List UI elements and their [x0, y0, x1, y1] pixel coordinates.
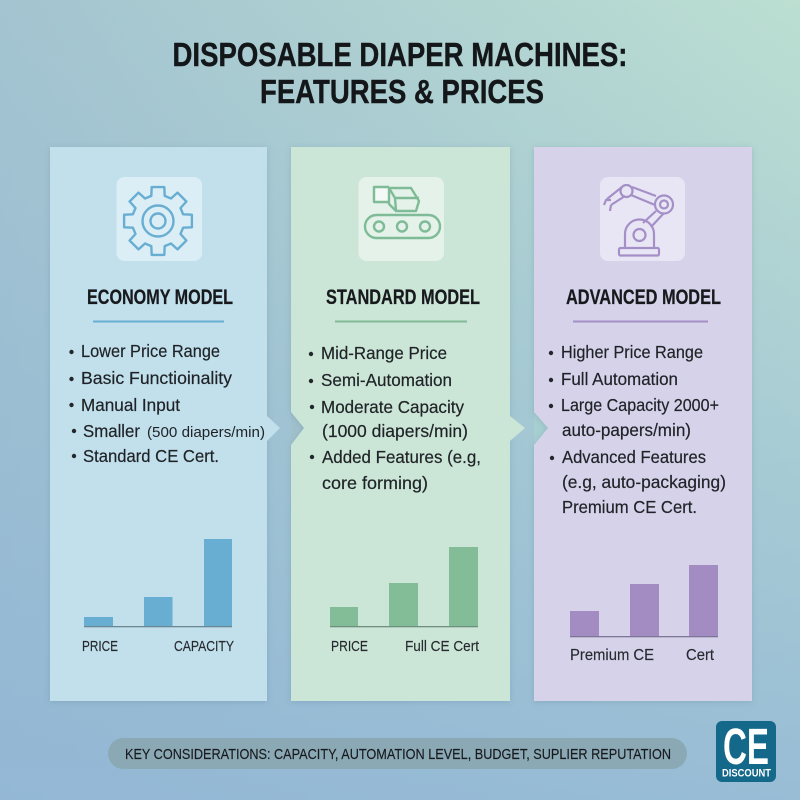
- feature list: advanced: Advanced Features: [562, 447, 706, 467]
- bar chart: economy: PRICE: [82, 638, 118, 655]
- feature list: economy: Standard CE Cert.: [83, 446, 219, 466]
- feature list: standard: Moderate Capacity: [321, 397, 464, 417]
- feature list: economy: Lower Price Range: [81, 341, 220, 361]
- bar chart: standard: PRICE: [331, 638, 368, 655]
- feature list: advanced: [549, 342, 726, 517]
- heading: advanced model: ADVANCED MODEL: [566, 285, 721, 309]
- bar chart: economy: CAPACITY: [174, 638, 234, 655]
- logo: CE discount: CE: [723, 718, 769, 775]
- title: DISPOSABLE DIAPER MACHINES:: [172, 36, 628, 73]
- feature list: standard: Added Features (e.g,: [322, 447, 481, 467]
- feature list: economy: Manual Input: [81, 395, 180, 415]
- icon: robot arm: [600, 177, 685, 261]
- feature list: advanced: Full Automation: [561, 369, 678, 389]
- bar chart: advanced: Cert: [686, 647, 715, 664]
- icon: conveyor: [358, 177, 444, 261]
- feature list: standard: [309, 343, 481, 493]
- feature list: standard: Mid-Range Price: [321, 343, 447, 363]
- heading: standard model: STANDARD MODEL: [326, 285, 480, 309]
- logo: CE discount: DISCOUNT: [722, 768, 771, 780]
- callout: key considerations: KEY CONSIDERATIONS: CAPACITY, AUTOMATION LEVEL, BUDGET, SUPLIER REPUTATION: [125, 746, 671, 763]
- feature list: advanced: Higher Price Range: [561, 342, 703, 362]
- feature list: advanced: Premium CE Cert.: [562, 497, 697, 517]
- feature list: economy: (500 diapers/min): [147, 424, 265, 441]
- arrow: standard to advanced: [510, 416, 525, 441]
- logo: CE discount: [716, 718, 776, 782]
- arrow: advanced notch: [534, 412, 548, 445]
- panel: advanced: [534, 147, 752, 701]
- feature list: advanced: (e.g, auto-packaging): [562, 472, 726, 492]
- heading: economy model: ECONOMY MODEL: [87, 285, 233, 309]
- feature list: advanced: Large Capacity 2000+: [561, 395, 719, 415]
- panel: standard: [291, 147, 525, 701]
- feature list: economy: Basic Functioinality: [81, 368, 232, 388]
- feature list: advanced: auto-papers/min): [562, 420, 691, 440]
- title: [172, 36, 628, 110]
- title: FEATURES & PRICES: [260, 73, 544, 110]
- feature list: standard: core forming): [322, 473, 428, 493]
- arrow: standard notch: [291, 412, 304, 445]
- icon: gear: [116, 177, 202, 261]
- feature list: economy: Smaller: [83, 421, 140, 441]
- bar chart: advanced: Premium CE: [570, 647, 654, 664]
- feature list: standard: Semi-Automation: [321, 370, 452, 390]
- bar chart: standard: [330, 547, 480, 655]
- arrow: economy to standard: [267, 416, 280, 441]
- callout: key considerations: [108, 738, 687, 769]
- bar chart: advanced: [570, 565, 718, 664]
- bar chart: economy: [82, 539, 234, 655]
- feature list: economy: [69, 341, 265, 466]
- bar chart: standard: Full CE Cert: [405, 638, 480, 655]
- panel: economy: [50, 147, 280, 701]
- feature list: standard: (1000 diapers/min): [322, 421, 468, 441]
